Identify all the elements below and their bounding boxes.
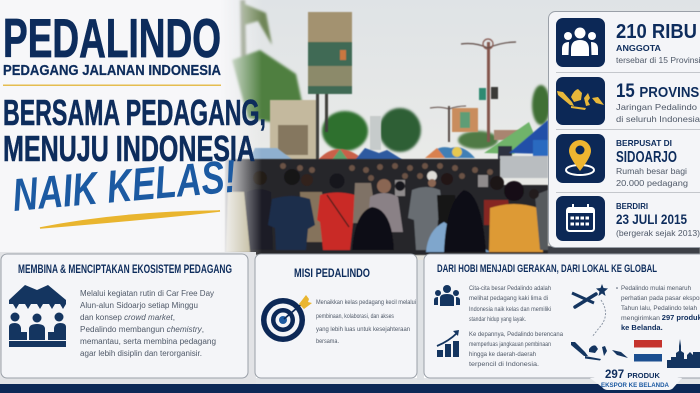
stat: founded: BERDIRI (616, 202, 648, 211)
lower background strip (0, 252, 256, 388)
photo: street lamps (430, 39, 516, 142)
body text: plans (469, 332, 564, 368)
icon: Indonesia map (556, 77, 605, 125)
icon: calendar (556, 196, 605, 241)
stat: sidoarjo: 20.000 pedagang (616, 178, 688, 188)
icon: location pin (556, 134, 605, 183)
icon: plane with dashed route (572, 284, 608, 337)
stat: founded: (bergerak sejak 2013) (616, 229, 700, 238)
body text: bersama. (316, 339, 339, 345)
panel: key stats (548, 12, 700, 248)
slogan line 2: MENUJU INDONESIA (3, 128, 255, 169)
icon: target (261, 295, 312, 342)
heading: MEMBINA & MENCIPTAKAN EKOSISTEM PEDAGANG (18, 264, 232, 276)
photo: left fade (0, 0, 262, 260)
icon: growth chart (437, 330, 459, 357)
body text: Pedalindo membangun chemistry, (80, 325, 204, 334)
icon: members (556, 18, 605, 67)
callout: 297 produk badge: 297 PRODUK (605, 369, 660, 381)
panel: ekosistem (1, 254, 248, 378)
photo: market tents (249, 120, 548, 178)
body text: export: mengirimkan 297 produk (621, 313, 700, 322)
body text: aspiration: standar hidup yang layak. (469, 317, 526, 323)
gold swoosh (40, 211, 220, 228)
body text: agar lebih disiplin dan terorganisir. (80, 349, 202, 358)
photo: billboard (308, 12, 352, 160)
body text: dan konsep crowd market, (80, 313, 175, 322)
stat: sidoarjo (616, 138, 688, 188)
main title block (3, 7, 266, 228)
stat: 210 ribu (616, 21, 700, 65)
slogan line 1: BERSAMA PEDAGANG, (3, 92, 266, 133)
stat: 210 ribu: ANGGOTA (616, 44, 661, 53)
gold rule (3, 84, 221, 86)
stat: sidoarjo: SIDOARJO (616, 149, 677, 166)
callout: 297 produk badge: EKSPOR KE BELANDA (601, 382, 669, 389)
photo: crowd (225, 159, 700, 256)
body text: yang lebih luas untuk kesejahteraan (316, 327, 410, 333)
stat: founded (616, 202, 700, 238)
subtitle: PEDAGANG JALANAN INDONESIA (3, 63, 221, 79)
body text: export: ke Belanda. (621, 323, 663, 332)
stat: founded: 23 JULI 2015 (616, 212, 687, 227)
icon: people (434, 285, 460, 306)
title: PEDALINDO (3, 7, 221, 69)
body text: export: perhatian pada pasar ekspor. (621, 295, 700, 302)
heading: MISI PEDALINDO (294, 266, 370, 280)
body text: aspiration: Indonesia naik kelas dan memiliki (469, 307, 551, 313)
stat: 210 ribu: tersebar di 15 Provinsi (616, 55, 700, 65)
body text: export (616, 285, 700, 332)
body text (80, 289, 216, 358)
photo: buildings (270, 100, 530, 160)
stat: sidoarjo: Rumah besar bagi (616, 166, 687, 176)
stat: 15 provinsi: Jaringan Pedalindo (616, 102, 697, 112)
icon: Indonesia map small (571, 342, 628, 360)
icon: Netherlands flag (634, 340, 662, 362)
body text: Alun-alun Sidoarjo setiap Minggu (80, 301, 198, 310)
body text: Menaikkan kelas pedagang kecil melalui (316, 300, 416, 306)
body text: aspiration: Cita-cita besar Pedalindo adalah (469, 286, 551, 292)
panel: misi (255, 254, 417, 378)
stat: 15 provinsi: di seluruh Indonesia (616, 114, 700, 124)
bottom navy band (0, 384, 700, 393)
body text: plans: memperluas jangkauan pembinaan (469, 342, 551, 348)
icon: market stall (9, 285, 66, 347)
body text: aspiration: melihat pedagang kaki lima di (469, 296, 548, 302)
body text: pembinaan, kolaborasi, dan akses (316, 314, 394, 320)
body text (316, 300, 416, 345)
panel: dari hobi menjadi gerakan (424, 254, 700, 378)
body text: export: Pedalindo mulai menaruh (621, 285, 692, 292)
photo: trees and palm (232, 0, 550, 152)
callout: 297 produk badge (590, 369, 682, 390)
body text: memantau, serta membina pedagang (80, 337, 216, 346)
body text: plans: Ke depannya, Pedalindo berencana (469, 332, 564, 338)
body text: plans: hingga ke daerah-daerah (469, 352, 536, 358)
body text: plans: terpencil di Indonesia. (469, 362, 539, 368)
icon: Dutch skyline (667, 339, 700, 368)
stat: 15 provinsi (616, 81, 700, 124)
body text: export: Tahun lalu, Pedalindo telah (621, 305, 698, 312)
stat: sidoarjo: BERPUSAT DI (616, 138, 672, 148)
body text: Melalui kegiatan rutin di Car Free Day (80, 289, 214, 298)
naik kelas tagline: NAIK KELAS! (10, 150, 238, 221)
street photo background (0, 0, 700, 260)
body text: aspiration (469, 286, 551, 323)
